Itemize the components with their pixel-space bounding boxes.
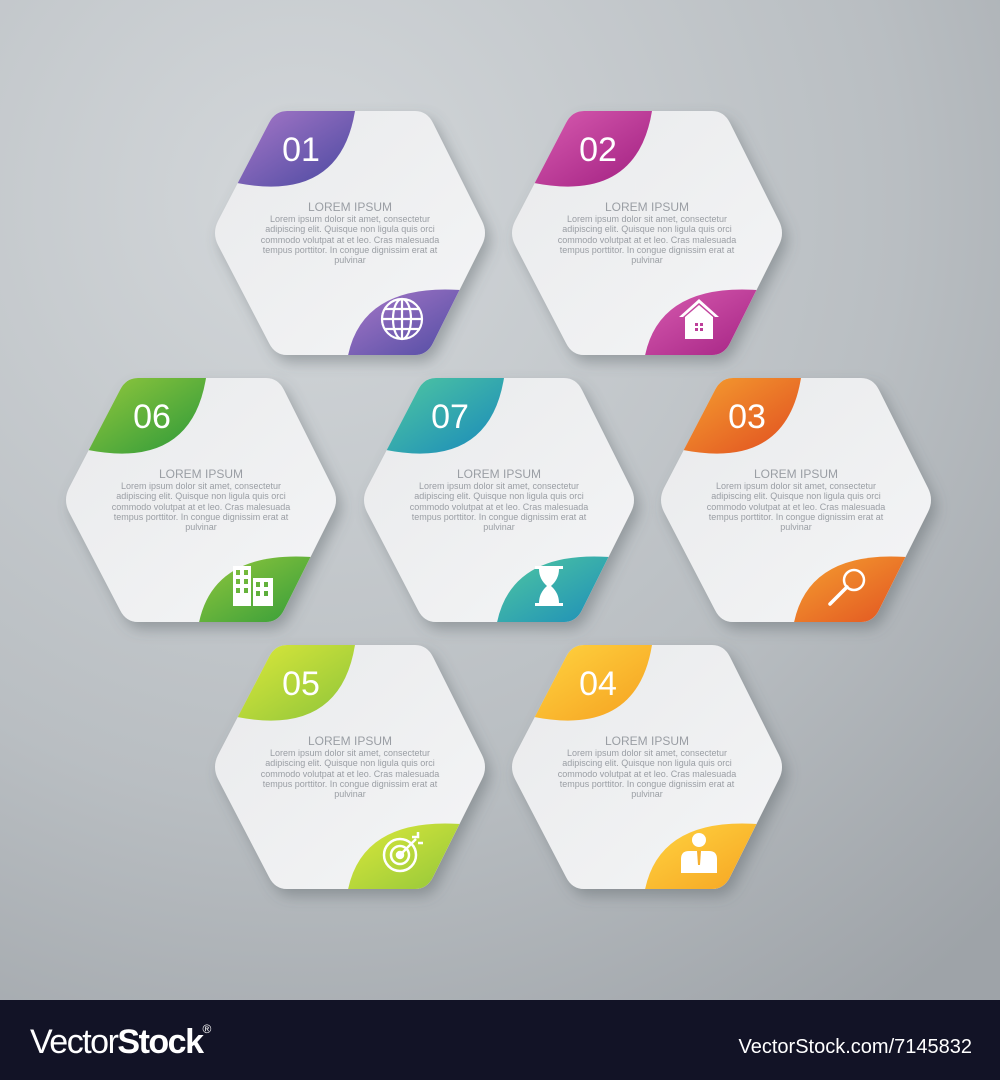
hexagon 01: Lorem ipsum dolor sit amet, consectetur (270, 214, 430, 224)
icon: buildings (233, 566, 273, 606)
hexagon 05: 05 (282, 665, 320, 703)
hexagon 07: adipiscing elit. Quisque non ligula quis orci (414, 491, 584, 501)
footer bar (0, 1000, 1000, 1080)
hexagon 07: tempus porttitor. In congue dignissim erat at (412, 512, 587, 522)
icon: person (681, 833, 717, 873)
footer logo: ® (202, 1022, 211, 1036)
hexagon 04: tempus porttitor. In congue dignissim erat at (560, 779, 735, 789)
hexagon 01: pulvinar (334, 255, 366, 265)
hexagon 05: adipiscing elit. Quisque non ligula quis orci (265, 758, 435, 768)
hexagon 04: 04 (579, 665, 617, 703)
hexagon 03: LOREM IPSUM (754, 467, 838, 481)
hexagon 04: LOREM IPSUM (605, 734, 689, 748)
hexagon 02 (512, 111, 782, 361)
hexagon 01 (215, 111, 485, 361)
hexagon 06: adipiscing elit. Quisque non ligula quis orci (116, 491, 286, 501)
icon: house (679, 299, 719, 339)
hexagon 03: tempus porttitor. In congue dignissim erat at (709, 512, 884, 522)
hexagon 01: adipiscing elit. Quisque non ligula quis orci (265, 224, 435, 234)
hexagon 02: adipiscing elit. Quisque non ligula quis orci (562, 224, 732, 234)
hexagon 03: adipiscing elit. Quisque non ligula quis orci (711, 491, 881, 501)
hexagon 04 (512, 645, 782, 895)
hexagon 07 (364, 378, 634, 628)
footer logo: VectorStock (30, 1023, 202, 1061)
hexagon 06: commodo volutpat at et leo. Cras malesuada (112, 502, 290, 512)
hexagon 01: commodo volutpat at et leo. Cras malesuada (261, 235, 439, 245)
icon: target (384, 832, 423, 871)
hexagon 06: Lorem ipsum dolor sit amet, consectetur (121, 481, 281, 491)
hexagon 04: Lorem ipsum dolor sit amet, consectetur (567, 748, 727, 758)
hexagon 07: LOREM IPSUM (457, 467, 541, 481)
hexagon 07: commodo volutpat at et leo. Cras malesuada (410, 502, 588, 512)
hexagon 01: 01 (282, 131, 320, 169)
hexagon 02: tempus porttitor. In congue dignissim erat at (560, 245, 735, 255)
footer url: VectorStock.com/7145832 (739, 1036, 972, 1058)
icon: magnifier (830, 570, 864, 604)
hexagon 03: 03 (728, 398, 766, 436)
hexagon 06 (66, 378, 336, 628)
icon: hourglass (535, 566, 563, 606)
hexagon 07: pulvinar (483, 522, 515, 532)
hexagon 01: LOREM IPSUM (308, 200, 392, 214)
hexagon 02: commodo volutpat at et leo. Cras malesuada (558, 235, 736, 245)
hexagon 02: LOREM IPSUM (605, 200, 689, 214)
hexagon 03: commodo volutpat at et leo. Cras malesuada (707, 502, 885, 512)
hexagon 04: commodo volutpat at et leo. Cras malesuada (558, 769, 736, 779)
hexagon 07: Lorem ipsum dolor sit amet, consectetur (419, 481, 579, 491)
hexagon 03: pulvinar (780, 522, 812, 532)
hexagon 05: commodo volutpat at et leo. Cras malesuada (261, 769, 439, 779)
hexagon 05 (215, 645, 485, 895)
hexagon 06: 06 (133, 398, 171, 436)
hexagon 03 (661, 378, 931, 628)
hexagon 05: tempus porttitor. In congue dignissim erat at (263, 779, 438, 789)
hexagon 03: Lorem ipsum dolor sit amet, consectetur (716, 481, 876, 491)
hexagon 04: pulvinar (631, 789, 663, 799)
hexagon 02: pulvinar (631, 255, 663, 265)
hexagon 07: 07 (431, 398, 469, 436)
hexagon 04: adipiscing elit. Quisque non ligula quis orci (562, 758, 732, 768)
hexagon 01: tempus porttitor. In congue dignissim erat at (263, 245, 438, 255)
hexagon 05: LOREM IPSUM (308, 734, 392, 748)
icon: globe (382, 299, 422, 339)
hexagon 06: pulvinar (185, 522, 217, 532)
hexagon 02: 02 (579, 131, 617, 169)
hexagon 05: pulvinar (334, 789, 366, 799)
hexagon 06: LOREM IPSUM (159, 467, 243, 481)
hexagon 02: Lorem ipsum dolor sit amet, consectetur (567, 214, 727, 224)
hexagon 06: tempus porttitor. In congue dignissim erat at (114, 512, 289, 522)
hexagon 05: Lorem ipsum dolor sit amet, consectetur (270, 748, 430, 758)
